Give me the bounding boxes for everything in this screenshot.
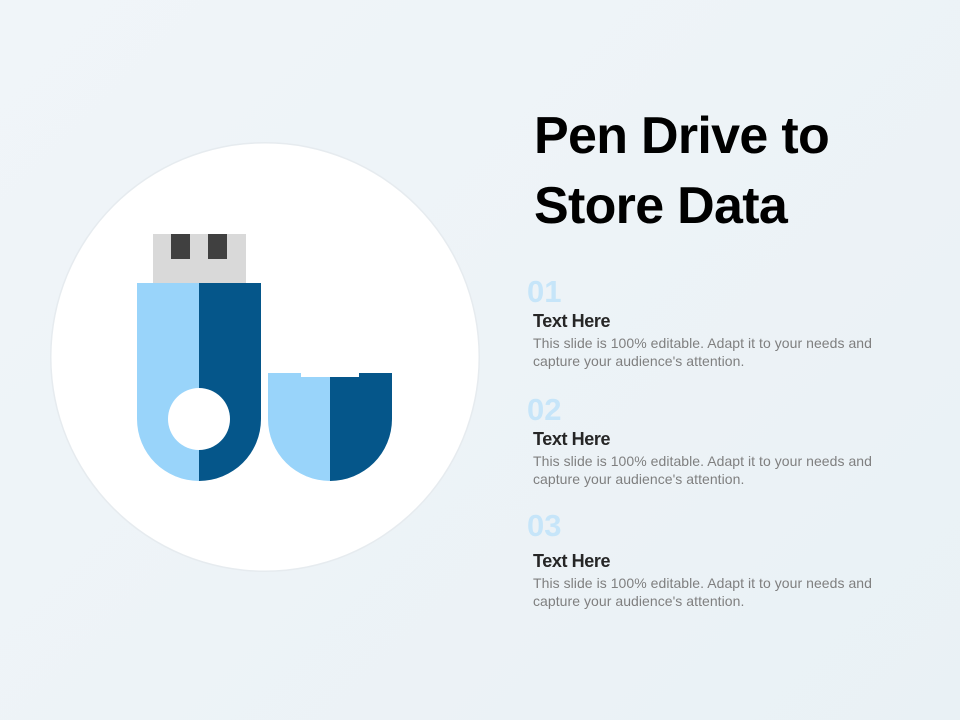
text block: item 02: 02	[527, 392, 561, 427]
text block: item 02	[527, 392, 872, 487]
icon: pen drive body	[137, 234, 261, 481]
title: Pen Drive to	[534, 107, 829, 165]
title	[534, 107, 829, 235]
text block: item 01: 01	[527, 274, 561, 309]
text block: item 01: capture your audience's attention.	[533, 353, 744, 369]
text block: item 03: Text Here	[533, 551, 610, 571]
text block: item 01: This slide is 100% editable. Adapt it to your needs and	[533, 335, 872, 351]
text block: item 03: This slide is 100% editable. Adapt it to your needs and	[533, 575, 872, 591]
panel: circle with pen drive illustration	[50, 142, 479, 570]
text block: item 01	[527, 274, 872, 369]
text block: item 02: This slide is 100% editable. Adapt it to your needs and	[533, 453, 872, 469]
text block: item 03: 03	[527, 508, 561, 543]
text block: item 03: capture your audience's attention.	[533, 593, 744, 609]
icon: pen drive cap	[268, 373, 392, 481]
text block: item 02: Text Here	[533, 429, 610, 449]
text block: item 01: Text Here	[533, 311, 610, 331]
text block: item 02: capture your audience's attention.	[533, 471, 744, 487]
title: Store Data	[534, 177, 787, 235]
